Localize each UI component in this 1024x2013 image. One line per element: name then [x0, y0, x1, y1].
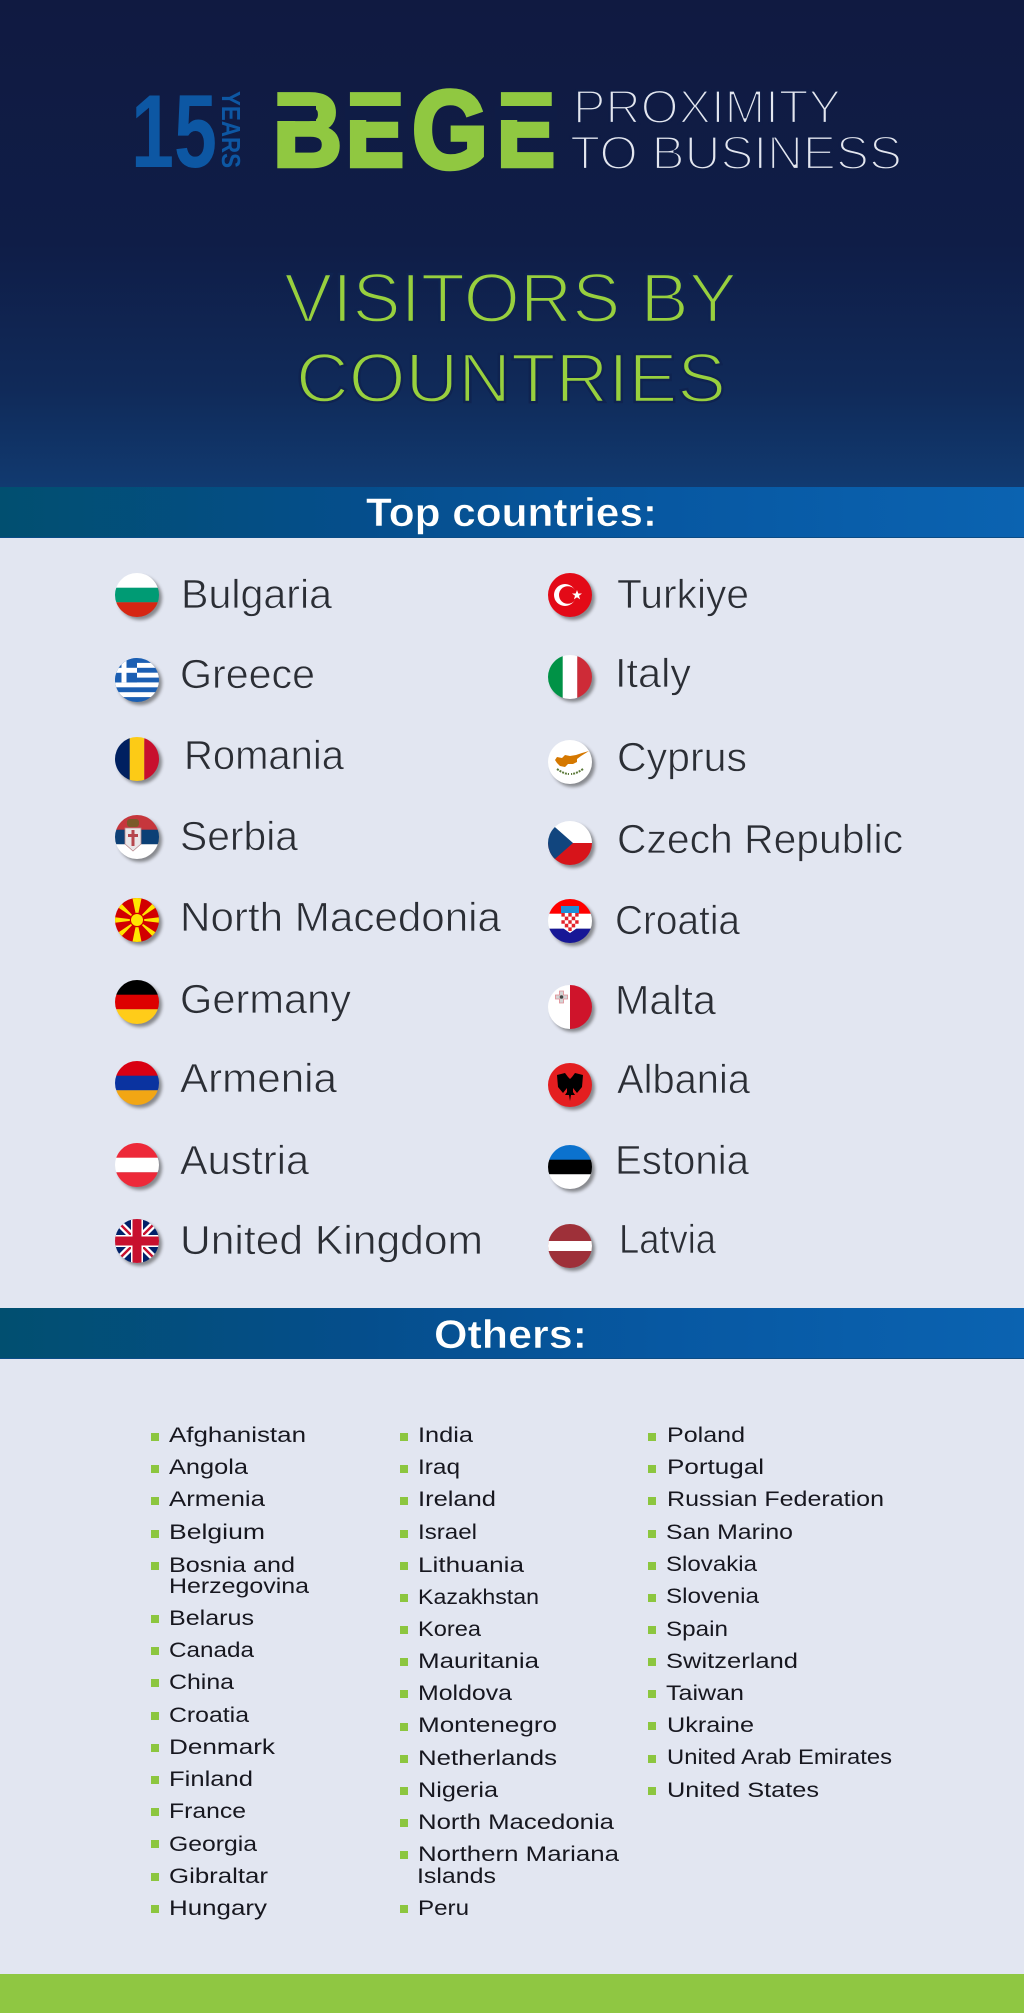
list: other countries column 1: Croatia — [169, 1704, 249, 1727]
title: VISITORS BY — [284, 259, 737, 337]
country: Croatia: Croatia — [615, 897, 740, 943]
list: other countries column 1: Finland — [169, 1768, 253, 1791]
list: other countries column 3: United Arab Emirates — [667, 1746, 892, 1769]
list: other countries column 2: Ireland — [418, 1488, 496, 1511]
country: Greece: Greece — [180, 651, 315, 697]
logo: BEGE wordmark: E — [346, 73, 404, 189]
country: Malta — [548, 984, 716, 1034]
list: other countries column 1: Afghanistan — [169, 1424, 306, 1447]
flag: Albania — [548, 1063, 595, 1110]
country: Serbia: Serbia — [180, 813, 298, 859]
list: other countries column 3: Slovakia — [666, 1553, 757, 1576]
list: other countries column 1: Canada — [169, 1639, 254, 1662]
country: Greece — [115, 658, 313, 707]
list: other countries column 1: Gibraltar — [169, 1865, 268, 1888]
logo: BEGE wordmark: G — [412, 69, 488, 192]
section band: top countries — [0, 487, 1024, 538]
country: Albania: Albania — [617, 1056, 750, 1102]
list: other countries column 3: Slovenia — [666, 1585, 759, 1608]
list: other countries column 1: Belarus — [169, 1607, 254, 1630]
section band: others — [0, 1308, 1024, 1359]
country: Estonia: Estonia — [615, 1137, 749, 1183]
list: other countries column 1: Angola — [169, 1456, 248, 1479]
list: other countries column 3 — [648, 1424, 892, 1802]
flag: United Kingdom — [115, 1219, 162, 1266]
flag: Estonia — [548, 1145, 595, 1192]
logo: tagline: TO BUSINESS — [570, 126, 902, 179]
country: Latvia — [548, 1224, 716, 1273]
list: other countries column 2: North Macedonia — [418, 1811, 614, 1834]
list: other countries column 2: Netherlands — [418, 1747, 557, 1770]
list: other countries column 2: Israel — [418, 1521, 477, 1544]
flag: Malta — [548, 985, 595, 1032]
title: COUNTRIES — [296, 339, 726, 417]
list: other countries column 2 — [400, 1424, 619, 1920]
country: Germany: Germany — [180, 976, 352, 1022]
list: other countries column 3: Poland — [667, 1424, 745, 1447]
country: Turkiye: Turkiye — [617, 571, 749, 617]
logo: BEGE wordmark: E — [497, 73, 555, 189]
flag: Germany — [115, 980, 162, 1027]
section band: others: Others: — [434, 1313, 587, 1357]
list: other countries column 1: China — [169, 1671, 234, 1694]
flag: Romania — [115, 737, 162, 784]
panel: header — [0, 0, 1024, 487]
country: Latvia: Latvia — [619, 1216, 716, 1262]
flag: Italy — [548, 655, 595, 702]
logo — [131, 69, 902, 192]
flag: North Macedonia — [113, 896, 162, 945]
country: Malta: Malta — [615, 977, 716, 1023]
list: other countries column 2: Northern Mariana — [418, 1843, 619, 1866]
panel: top countries left column — [113, 571, 501, 1266]
list: other countries column 1: Denmark — [169, 1736, 276, 1759]
list: other countries column 3: Spain — [666, 1618, 728, 1641]
list: other countries column 3: Portugal — [667, 1456, 764, 1479]
list: other countries column 1 — [151, 1424, 309, 1920]
country: Cyprus: Cyprus — [617, 734, 747, 780]
country: Armenia: Armenia — [180, 1055, 337, 1101]
list: other countries column 2: Lithuania — [418, 1554, 524, 1577]
list: other countries column 2: Peru — [418, 1897, 469, 1920]
logo: 15 years: 15 — [131, 74, 217, 190]
flag: Cyprus — [548, 740, 595, 787]
country: Albania — [548, 1056, 750, 1110]
list: other countries column 1: Armenia — [169, 1488, 265, 1511]
logo: tagline — [570, 80, 902, 179]
list: other countries column 3: Switzerland — [666, 1650, 798, 1673]
list: other countries column 1: Georgia — [169, 1833, 257, 1856]
list: other countries column 3: Ukraine — [667, 1714, 754, 1737]
flag: Croatia — [548, 899, 595, 946]
flag: Czech Republic — [548, 821, 595, 868]
section band: top countries: Top countries: — [366, 491, 657, 535]
list: other countries column 2: Islands — [417, 1865, 496, 1888]
flag: Austria — [115, 1143, 162, 1190]
country: Armenia — [115, 1055, 337, 1108]
country: Austria — [115, 1137, 309, 1190]
list: other countries column 1: Herzegovina — [169, 1575, 309, 1598]
flag: Armenia — [115, 1061, 162, 1108]
list: other countries column 3: San Marino — [666, 1521, 793, 1544]
list: other countries column 1: Belgium — [169, 1521, 265, 1544]
list: other countries column 2: Iraq — [418, 1456, 460, 1479]
list: other countries column 3: Taiwan — [666, 1682, 744, 1705]
list: other countries column 2: Korea — [418, 1618, 481, 1641]
flag: Serbia — [115, 815, 162, 862]
list: other countries column 2: Nigeria — [418, 1779, 498, 1802]
title — [284, 259, 737, 417]
country: Romania — [115, 732, 344, 784]
footer bar — [0, 1974, 1024, 2013]
flag: Latvia — [548, 1224, 595, 1271]
country: Serbia — [115, 813, 298, 862]
logo: BEGE wordmark: B — [273, 73, 342, 189]
country: Turkiye — [548, 571, 749, 620]
list: other countries column 1: Hungary — [169, 1897, 268, 1920]
country: Romania: Romania — [184, 732, 344, 778]
list: other countries column 3: Russian Federation — [667, 1488, 884, 1511]
list: other countries column 1: Bosnia and — [169, 1554, 295, 1577]
list: other countries column 3: United States — [667, 1779, 819, 1802]
logo: 15 years: YEARS — [216, 91, 246, 168]
flag: Bulgaria — [115, 573, 162, 620]
list: other countries column 2: India — [418, 1424, 473, 1447]
country: Italy: Italy — [615, 650, 691, 696]
list: other countries column 2: Moldova — [418, 1682, 512, 1705]
flag: Turkiye — [548, 573, 595, 620]
logo: letter notches — [270, 106, 557, 121]
country: Estonia — [548, 1144, 749, 1194]
list: other countries column 2: Mauritania — [418, 1650, 539, 1673]
country: Germany — [115, 976, 352, 1027]
panel: top countries right column — [548, 571, 903, 1271]
country: Austria: Austria — [180, 1137, 309, 1183]
country: Bulgaria — [115, 571, 332, 620]
country: Czech Republic: Czech Republic — [617, 816, 903, 862]
country: United Kingdom: United Kingdom — [180, 1217, 483, 1263]
list: other countries column 1: France — [169, 1800, 246, 1823]
country: Croatia — [548, 897, 740, 946]
list: other countries column 2: Montenegro — [418, 1714, 557, 1737]
country: North Macedonia: North Macedonia — [180, 894, 501, 940]
country: Cyprus — [548, 734, 747, 787]
country: Bulgaria: Bulgaria — [181, 571, 332, 617]
logo: tagline: PROXIMITY — [573, 80, 841, 133]
flag: Greece — [115, 658, 162, 705]
logo: BEGE wordmark — [273, 69, 555, 192]
list: other countries column 2: Kazakhstan — [418, 1586, 539, 1609]
country: Italy — [548, 650, 691, 702]
